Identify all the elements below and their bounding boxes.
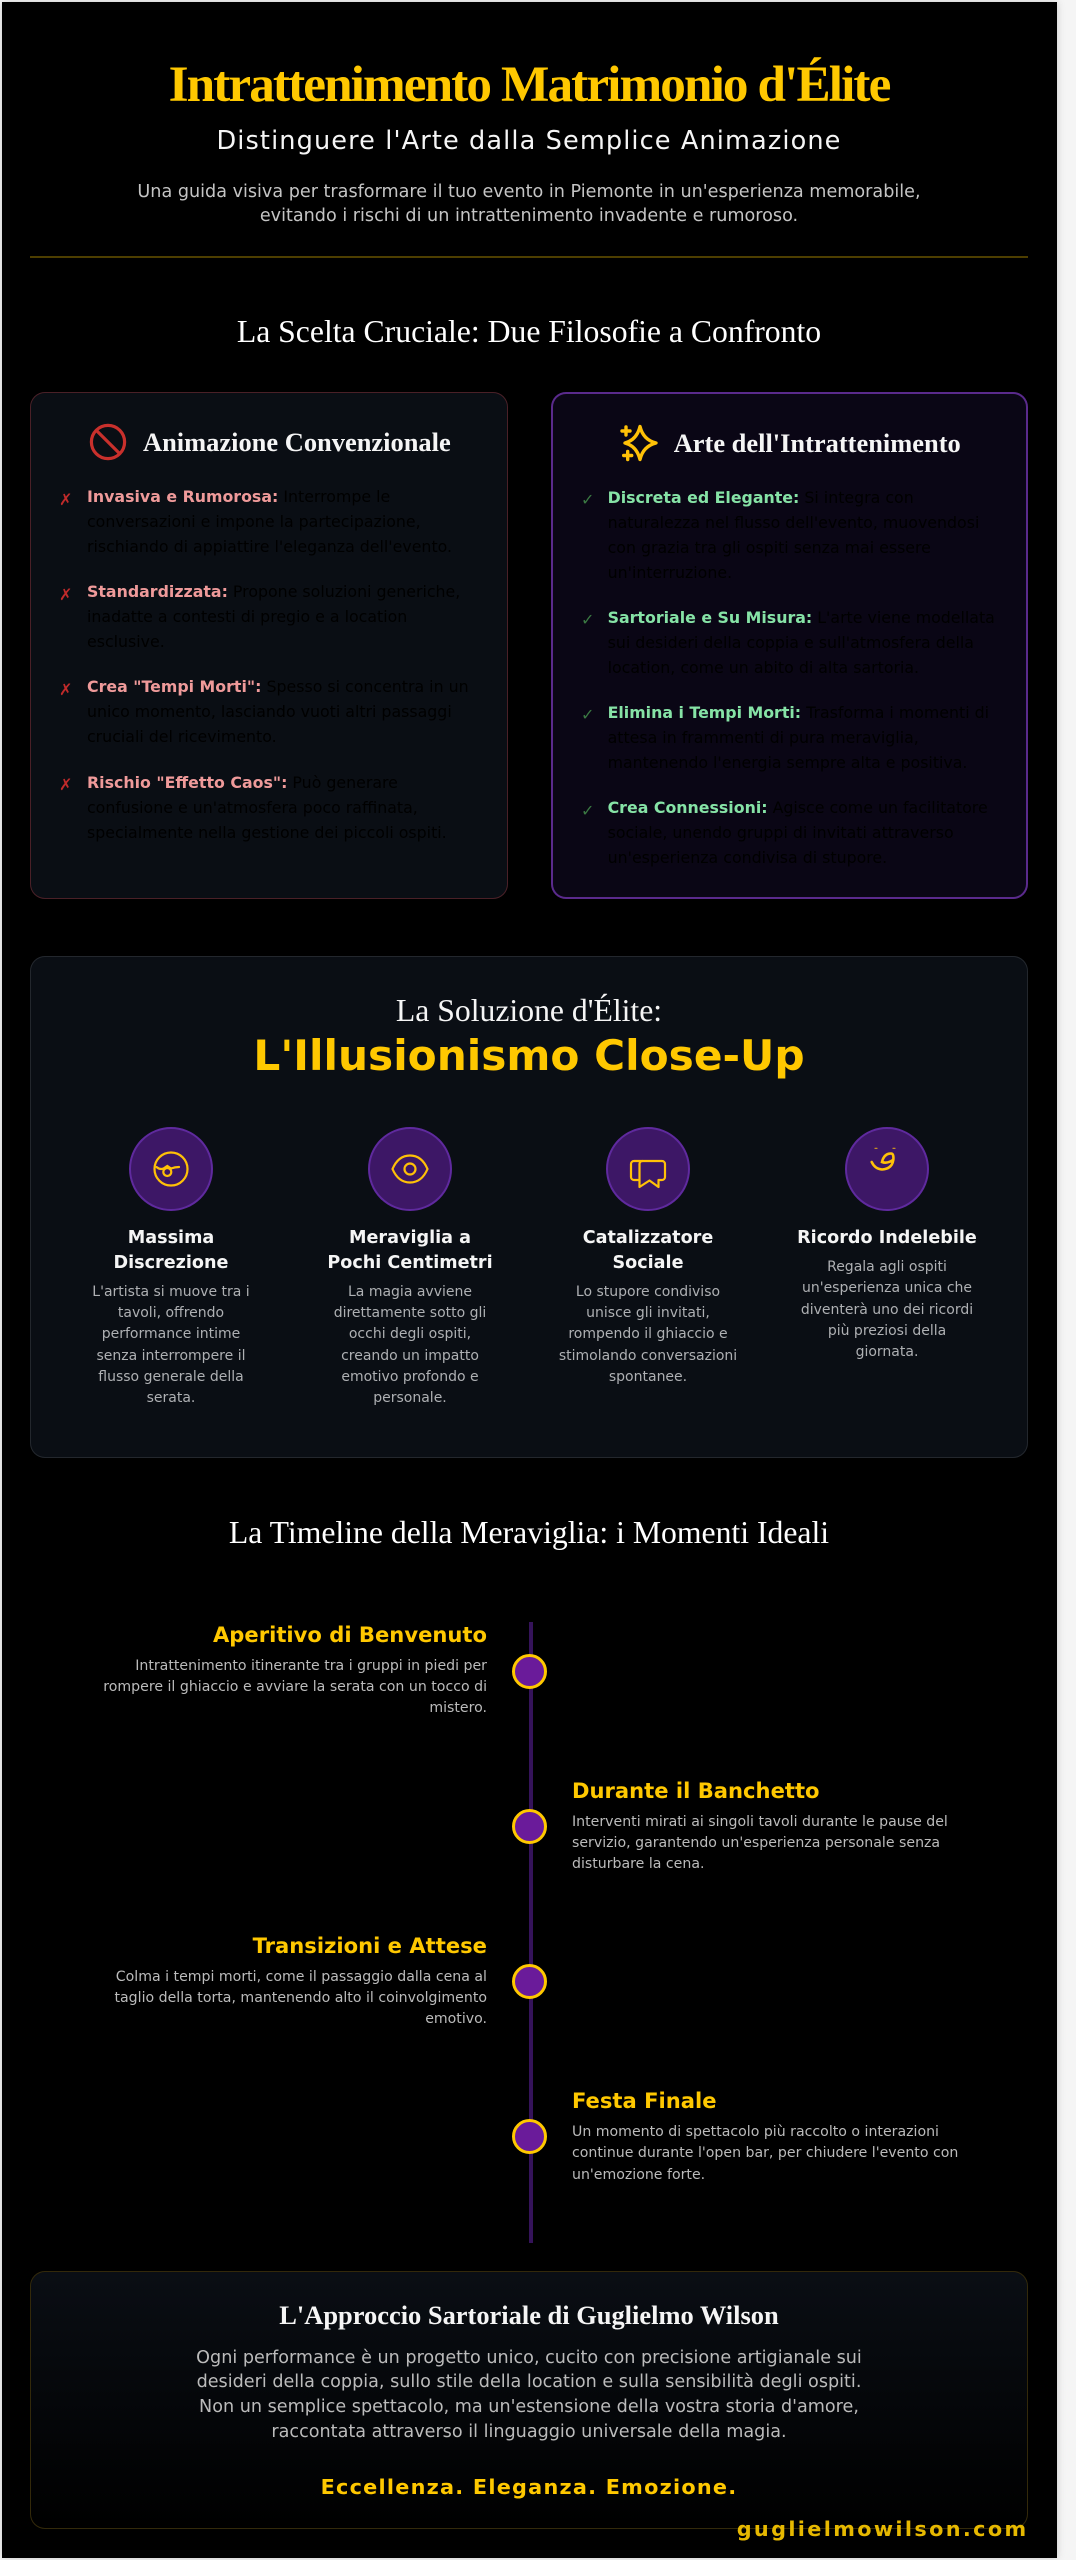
- footer: website: guglielmowilson.com: [737, 2517, 1028, 2541]
- timeline item: transizioni: Transizioni e Attese: [253, 1933, 487, 1958]
- title: Discrezione: [114, 1253, 228, 1273]
- description: Lo stupore condiviso: [576, 1284, 720, 1300]
- description: serata.: [147, 1390, 195, 1406]
- timeline dot 1: [512, 1654, 547, 1688]
- panel: animazione convenzionale: [30, 392, 508, 899]
- description: tavoli, offrendo: [118, 1305, 224, 1321]
- icon: sparkles: [620, 424, 658, 462]
- timeline item: festa finale: Un momento di spettacolo più raccolto o interazioni: [572, 2124, 939, 2140]
- timeline item: aperitivo: mistero.: [429, 1700, 487, 1716]
- intro text: Una guida visiva per trasformare il tuo evento in Piemonte in un'esperienza memorabile,: [137, 182, 921, 202]
- heading: arte: Arte dell'Intrattenimento: [674, 428, 961, 458]
- timeline item: aperitivo: Aperitivo di Benvenuto: [213, 1622, 487, 1647]
- description: L'artista si muove tra i: [92, 1284, 250, 1300]
- item: effetto caos: [59, 772, 447, 842]
- item: connessioni: ✓: [581, 800, 594, 820]
- timeline item: banchetto: servizio, garantendo un'esperienza personale senza: [572, 1835, 940, 1851]
- item: standardizzata: inadatte a contesti di pregio e a location: [87, 607, 407, 626]
- title: [114, 1228, 228, 1273]
- item: invasiva: [59, 487, 452, 556]
- timeline item: aperitivo: [103, 1622, 487, 1716]
- item: standardizzata: esclusive.: [87, 632, 165, 651]
- text: approccio: Ogni performance è un progetto unico, cucito con precisione artigianale sui: [196, 2348, 862, 2368]
- title: Catalizzatore: [583, 1228, 713, 1248]
- item: effetto caos: confusione e un'atmosfera poco raffinata,: [87, 798, 418, 816]
- timeline dot 3: [512, 1964, 547, 1998]
- description: [559, 1284, 737, 1385]
- text: approccio: [196, 2348, 862, 2442]
- description: La magia avviene: [348, 1284, 472, 1300]
- item: sartoriale: sui desideri della coppia e sull'atmosfera della: [608, 633, 974, 652]
- heading: approccio: L'Approccio Sartoriale di Guglielmo Wilson: [279, 2300, 779, 2330]
- description: diventerà uno dei ricordi: [801, 1302, 973, 1318]
- item: effetto caos: ✗: [59, 775, 72, 794]
- description: performance intime: [102, 1326, 240, 1342]
- heading: close-up: L'Illusionismo Close-Up: [253, 1031, 805, 1080]
- icon: ban: [90, 424, 126, 460]
- item: sartoriale: Sartoriale e Su Misura: L'arte viene modellata: [608, 608, 995, 627]
- description: giornata.: [856, 1344, 918, 1360]
- title: [583, 1228, 713, 1273]
- description: rompendo il ghiaccio e: [568, 1326, 728, 1342]
- heading: due filosofie: La Scelta Cruciale: Due Filosofie a Confronto: [237, 314, 821, 349]
- timeline item: aperitivo: Intrattenimento itinerante tra i gruppi in piedi per: [135, 1658, 487, 1674]
- timeline item: banchetto: [572, 1778, 948, 1872]
- item: invasiva: Invasiva e Rumorosa: Interrompe le: [87, 487, 390, 506]
- description: direttamente sotto gli: [334, 1305, 486, 1321]
- item: tempi morti: unico momento, lasciando vuoti altri passaggi: [87, 702, 452, 721]
- timeline dot 4: [512, 2119, 547, 2154]
- heading: timeline: La Timeline della Meraviglia: i Momenti Ideali: [229, 1515, 829, 1550]
- item: invasiva: rischiando di appiattire l'eleganza dell'evento.: [87, 537, 452, 556]
- intro text: evitando i rischi di un intrattenimento invadente e rumoroso.: [260, 206, 798, 226]
- icon: eye: [368, 1126, 452, 1210]
- subtitle: Distinguere l'Arte dalla Semplice Animazione: [216, 126, 842, 156]
- panel: illusionismo close-up: [30, 956, 1028, 1458]
- description: senza interrompere il: [96, 1348, 245, 1364]
- timeline item: banchetto: Durante il Banchetto: [572, 1778, 820, 1803]
- timeline item: transizioni: taglio della torta, mantenendo alto il coinvolgimento: [114, 1990, 487, 2006]
- timeline item: festa finale: [572, 2088, 958, 2183]
- item: elimina: mantenendo l'energia sempre alta e positiva.: [608, 753, 967, 772]
- item: connessioni: un'esperienza condivisa di stupore.: [608, 848, 887, 867]
- item: sartoriale: ✓: [581, 610, 594, 629]
- title: [327, 1228, 493, 1273]
- item: discreta: Discreta ed Elegante: Si integra con: [608, 488, 914, 507]
- item: tempi morti: ✗: [59, 680, 72, 699]
- item: tempi morti: Crea "Tempi Morti": Spesso si concentra in un: [87, 677, 469, 696]
- description: [334, 1284, 486, 1406]
- timeline item: banchetto: Interventi mirati ai singoli tavoli durante le pause del: [572, 1814, 948, 1830]
- icon: discrezione: [129, 1126, 213, 1210]
- description: spontanee.: [609, 1369, 687, 1385]
- text: approccio: Non un semplice spettacolo, ma un'estensione della vostra storia d'amore,: [199, 2397, 859, 2417]
- item: elimina: ✓: [581, 705, 594, 724]
- description: emotivo profondo e: [341, 1369, 479, 1385]
- feature: catalizzatore: [559, 1127, 737, 1385]
- item: elimina: [581, 703, 989, 772]
- item: discreta: un'interruzione.: [608, 563, 732, 582]
- description: stimolando conversazioni: [559, 1348, 737, 1364]
- title: Ricordo Indelebile: [797, 1228, 977, 1248]
- chart: timeline: [103, 1622, 958, 2243]
- icon: ricordo: [845, 1126, 929, 1210]
- description: [801, 1259, 973, 1360]
- title: Sociale: [612, 1253, 684, 1273]
- heading: animazione: Animazione Convenzionale: [143, 427, 451, 457]
- item: tempi morti: cruciali del ricevimento.: [87, 727, 277, 746]
- timeline dot 2: [512, 1809, 547, 1844]
- feature: meraviglia: [327, 1127, 493, 1406]
- description: Regala agli ospiti: [827, 1259, 947, 1275]
- item: connessioni: Crea Connessioni: Agisce come un facilitatore: [608, 798, 988, 817]
- timeline item: festa finale: continue durante l'open bar, per chiudere l'evento con: [572, 2145, 958, 2161]
- item: invasiva: conversazioni e impone la partecipazione,: [87, 512, 421, 531]
- item: standardizzata: [59, 582, 460, 651]
- timeline item: banchetto: disturbare la cena.: [572, 1856, 704, 1872]
- text: approccio: raccontata attraverso il linguaggio universale della magia.: [271, 2422, 787, 2442]
- item: elimina: attesa in frammenti di pura meraviglia,: [608, 728, 919, 747]
- title: Pochi Centimetri: [327, 1253, 493, 1273]
- item: effetto caos: specialmente nella gestione dei piccoli ospiti.: [87, 822, 447, 842]
- description: occhi degli ospiti,: [349, 1326, 471, 1342]
- timeline item: festa finale: Festa Finale: [572, 2088, 717, 2113]
- item: connessioni: sociale, unendo gruppi di invitati attraverso: [608, 823, 954, 842]
- item: discreta: naturalezza nel flusso dell'evento, muovendosi: [608, 513, 979, 532]
- timeline item: aperitivo: rompere il ghiaccio e avviare la serata con un tocco di: [103, 1679, 487, 1695]
- tagline: Eccellenza. Eleganza. Emozione.: [321, 2475, 737, 2499]
- item: discreta: [581, 488, 979, 582]
- timeline item: festa finale: un'emozione forte.: [572, 2167, 705, 2183]
- panel: arte dell'intrattenimento: [550, 392, 1028, 899]
- description: un'esperienza unica che: [802, 1280, 972, 1296]
- item: invasiva: ✗: [59, 490, 72, 508]
- item: effetto caos: Rischio "Effetto Caos": Può generare: [87, 772, 398, 792]
- item: tempi morti: [59, 677, 469, 746]
- timeline item: transizioni: Colma i tempi morti, come il passaggio dalla cena al: [116, 1969, 487, 1985]
- item: sartoriale: [581, 608, 995, 677]
- item: elimina: Elimina i Tempi Morti: Trasforma i momenti di: [608, 703, 989, 722]
- timeline item: transizioni: [114, 1933, 487, 2027]
- item: discreta: ✓: [581, 490, 594, 509]
- heading: soluzione: La Soluzione d'Élite:: [396, 993, 662, 1028]
- panel: approccio sartoriale: [30, 2271, 1028, 2529]
- title: Intrattenimento Matrimonio d'Élite: [169, 56, 889, 113]
- timeline item: transizioni: emotivo.: [425, 2011, 487, 2027]
- icon: chat bubbles: [606, 1126, 690, 1210]
- description: più preziosi della: [828, 1323, 946, 1339]
- description: creando un impatto: [341, 1348, 479, 1364]
- text: approccio: desideri della coppia, sullo stile della location e sulla sensibilità degli ospiti.: [197, 2372, 861, 2392]
- description: unisce gli invitati,: [586, 1305, 710, 1321]
- item: standardizzata: Standardizzata: Propone soluzioni generiche,: [87, 582, 460, 601]
- item: sartoriale: location, come un abito di alta sartoria.: [608, 658, 919, 677]
- feature: discrezione: [92, 1127, 250, 1406]
- description: personale.: [373, 1390, 447, 1406]
- title: Massima: [128, 1228, 214, 1248]
- intro text: [137, 182, 921, 226]
- item: connessioni: [581, 798, 988, 867]
- title: Meraviglia a: [349, 1228, 471, 1248]
- item: discreta: con grazia tra gli ospiti senza mai essere: [608, 538, 931, 557]
- item: standardizzata: ✗: [59, 584, 72, 604]
- feature: ricordo: [797, 1127, 977, 1360]
- description: [92, 1284, 250, 1406]
- description: flusso generale della: [98, 1369, 244, 1385]
